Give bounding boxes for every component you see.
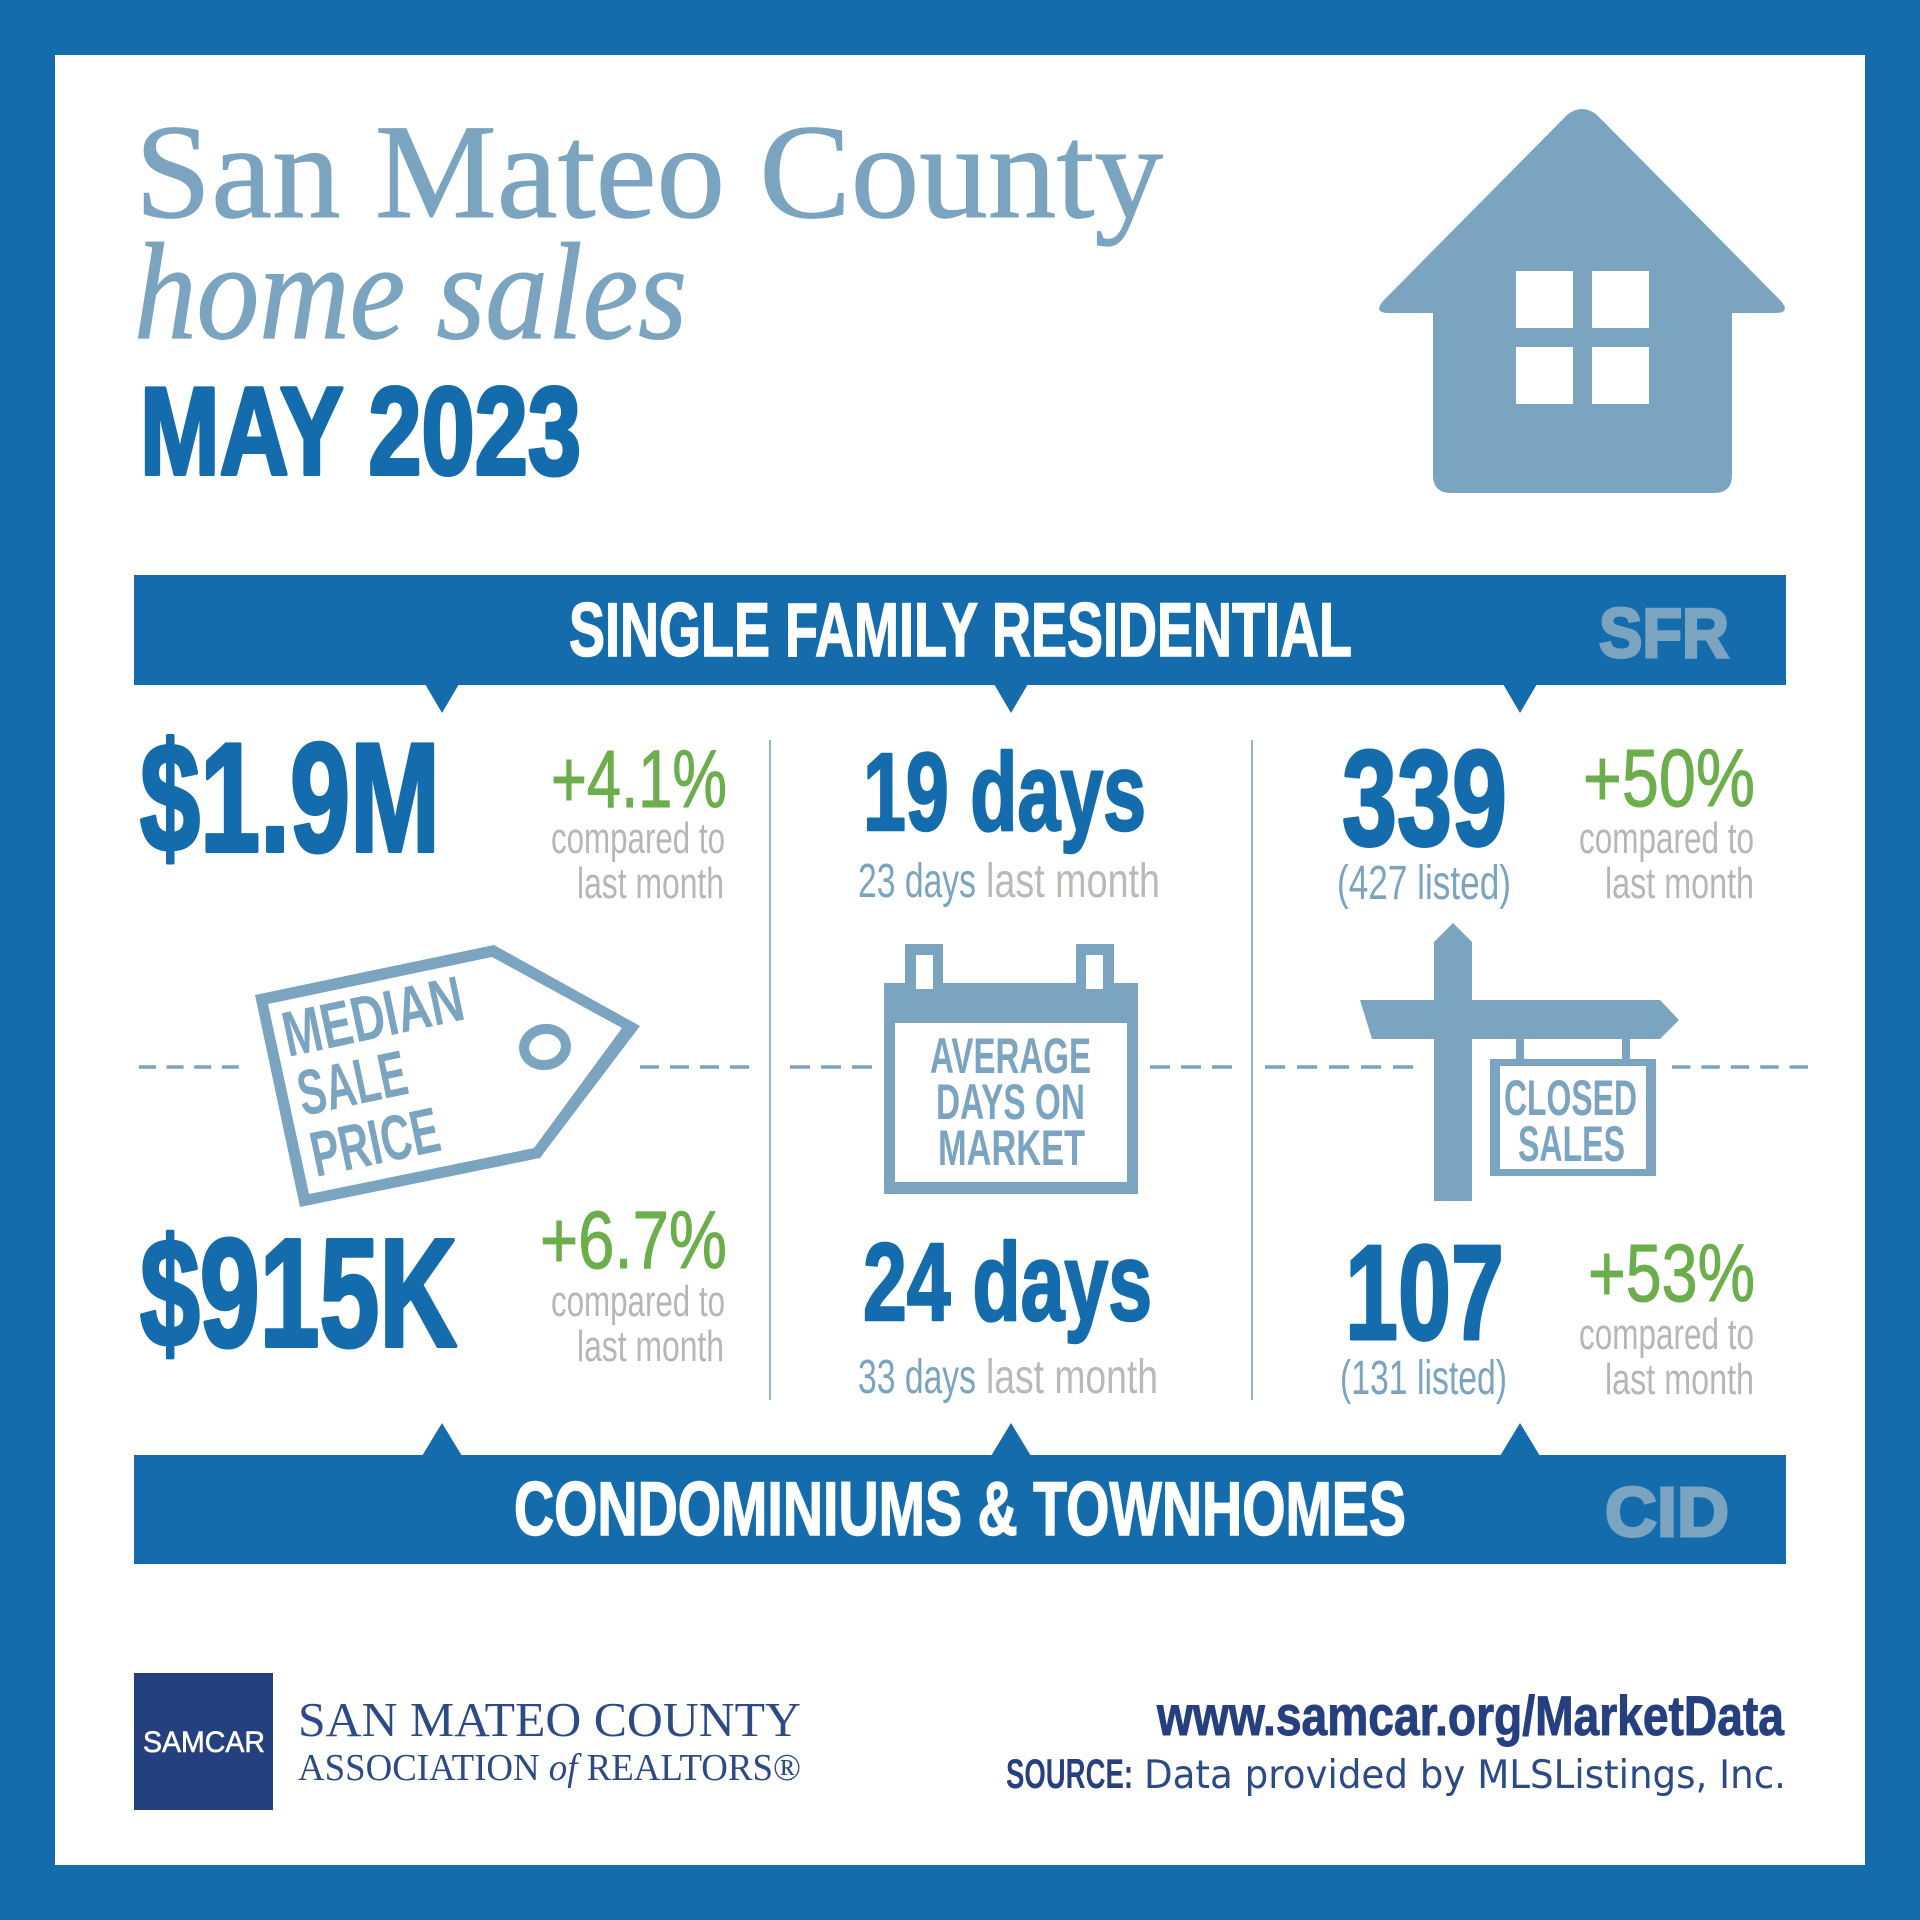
change: SFR closed sales [1579, 733, 1755, 908]
icon: price tag: PRICE [304, 1093, 446, 1191]
banner: single family residential: SFR [1599, 594, 1729, 672]
change: CID closed sales: +53% [1588, 1228, 1755, 1319]
logo: SAMCAR: SAMCAR [143, 1726, 265, 1759]
dashed divider [139, 1065, 1808, 1069]
icon: calendar: DAYS ON [936, 1074, 1085, 1130]
panel: median sale price [140, 711, 727, 1379]
logo: SAMCAR [134, 1673, 273, 1810]
change: CID closed sales: compared to [1579, 1310, 1754, 1359]
note: SFR days last month [858, 855, 1160, 908]
icon: closed sales sign: CLOSED [1504, 1070, 1637, 1126]
organization name [298, 1692, 801, 1789]
icon: calendar [884, 944, 1138, 1194]
panel: closed sales [1337, 722, 1755, 1405]
banner: condominiums and townhomes [134, 1423, 1786, 1564]
change: SFR median price [551, 734, 727, 908]
note: CID days last month [858, 1351, 1158, 1404]
change: SFR median price: compared to [551, 814, 725, 863]
stat: SFR closed sales: 339 [1342, 722, 1507, 874]
change: CID closed sales [1579, 1228, 1755, 1404]
column dividers [770, 740, 1252, 1400]
note: CID days last month: 33 days [858, 1351, 976, 1404]
banner: single family residential [134, 575, 1786, 713]
change: SFR closed sales: compared to [1579, 814, 1754, 863]
icon: calendar: AVERAGE [930, 1028, 1091, 1084]
note: SFR days last month: last month [986, 855, 1160, 908]
icon: house [1379, 109, 1785, 493]
change: CID median price [540, 1195, 727, 1371]
source note: SOURCE: [1006, 1750, 1133, 1797]
organization name: SAN MATEO COUNTY [298, 1692, 801, 1747]
note: SFR days last month: 23 days [858, 855, 976, 908]
stat: SFR days: 19 days [863, 731, 1146, 854]
banner: condominiums and townhomes: CID [1605, 1473, 1729, 1551]
stat: CID median price: $915K [140, 1207, 457, 1379]
change: CID median price: +6.7% [540, 1195, 727, 1286]
source note: Data provided by MLSListings, Inc. [1144, 1753, 1786, 1798]
title: MAY 2023 [140, 363, 581, 501]
stat: SFR median price: $1.9M [140, 711, 440, 884]
note: CID days last month: last month [986, 1351, 1158, 1404]
change: CID median price: compared to [551, 1277, 725, 1326]
title [134, 98, 1163, 501]
title: San Mateo County [135, 98, 1163, 247]
organization name: ASSOCIATION of REALTORS® [298, 1747, 801, 1789]
change: CID median price: last month [577, 1322, 724, 1371]
change: SFR closed sales: +50% [1583, 733, 1755, 824]
icon: price tag: SALE [291, 1036, 414, 1130]
icon: price tag [255, 945, 640, 1207]
icon: price tag: MEDIAN [276, 962, 470, 1071]
banner: single family residential: SINGLE FAMILY RESIDENTIAL [569, 588, 1352, 673]
icon: calendar: MARKET [938, 1120, 1085, 1176]
panel: average days on market [858, 731, 1160, 1404]
note: SFR listed: (427 listed) [1337, 857, 1511, 910]
website link: www.samcar.org/MarketData [1156, 1684, 1785, 1747]
banner: condominiums and townhomes: CONDOMINIUMS & TOWNHOMES [514, 1467, 1406, 1552]
change: CID closed sales: last month [1605, 1355, 1754, 1404]
stat: CID days: 24 days [863, 1221, 1152, 1344]
icon: closed sales sign: SALES [1518, 1116, 1625, 1172]
change: SFR closed sales: last month [1605, 859, 1754, 908]
change: SFR median price: +4.1% [551, 734, 727, 825]
note: CID listed: (131 listed) [1340, 1352, 1507, 1405]
stat: CID closed sales: 107 [1345, 1217, 1504, 1368]
change: SFR median price: last month [577, 859, 724, 908]
icon: closed sales sign [1360, 923, 1679, 1201]
title: home sales [134, 215, 687, 368]
